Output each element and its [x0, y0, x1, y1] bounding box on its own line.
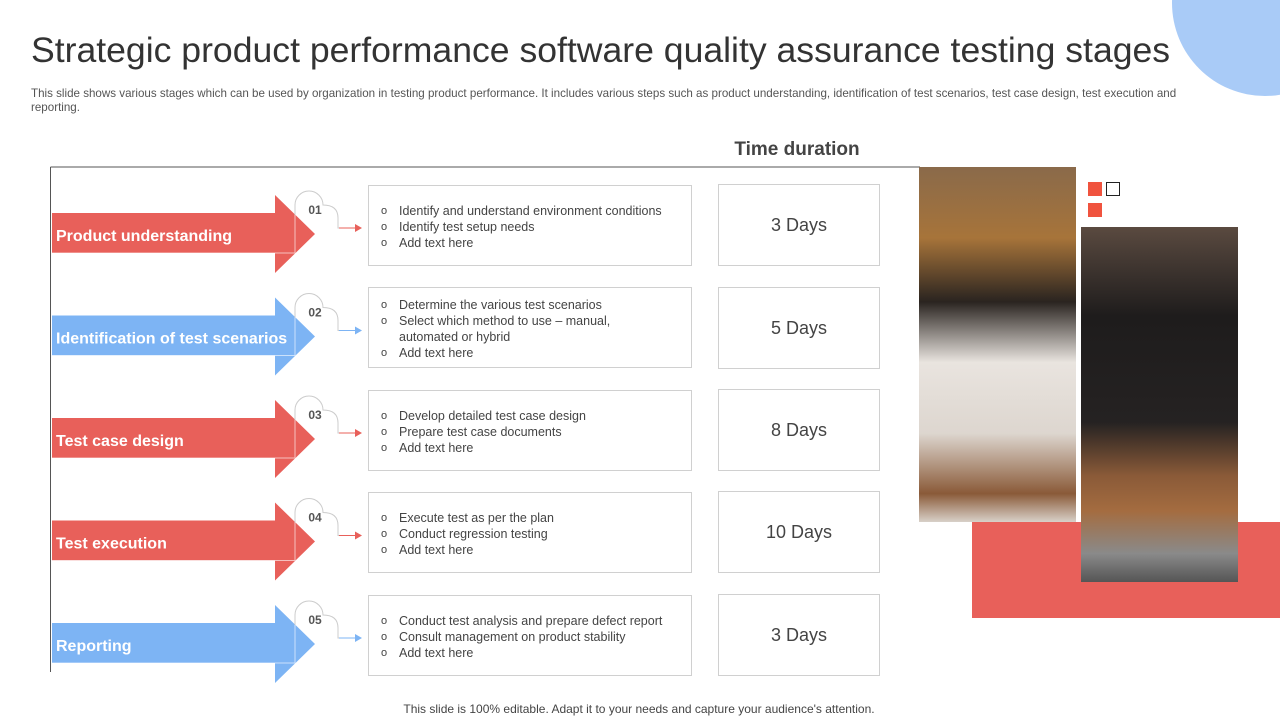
text box 4: Add text here — [399, 543, 473, 557]
duration 2 — [718, 287, 880, 369]
arrow 5: 05 — [308, 613, 322, 627]
arrow 1 — [52, 191, 362, 273]
text box 3 — [368, 390, 692, 471]
arrow 3: Test case design — [56, 433, 184, 450]
arrow 4: 04 — [308, 510, 322, 524]
arrow 5 — [52, 601, 362, 683]
arrow 1: Product understanding — [56, 228, 232, 245]
duration 3 — [718, 389, 880, 471]
duration 5 — [718, 594, 880, 676]
text box 2: Select which method to use – manual, automated or hybrid — [399, 314, 610, 344]
text box 4: Execute test as per the plan — [399, 511, 554, 525]
arrow 2: Identification of test scenarios — [56, 330, 287, 348]
subtitle: This slide shows various stages which can be used by organization in testing product performance. It includes various steps such as product understanding, identification of test scenarios, test case design, test execution and reporting. — [31, 87, 1176, 114]
red block — [972, 522, 1280, 618]
photo 1 — [919, 167, 1076, 522]
text box 4 — [368, 492, 692, 573]
decorative squares — [1088, 182, 1102, 196]
arrow 1: 01 — [308, 203, 322, 217]
arrow 3: 03 — [308, 408, 322, 422]
text box 4: Conduct regression testing — [399, 527, 548, 541]
text box 5: Consult management on product stability — [399, 630, 626, 644]
heading: time duration: Time duration — [734, 139, 860, 160]
text box 1 — [368, 185, 692, 266]
duration 3: 8 Days — [771, 420, 827, 440]
arrow 4 — [52, 498, 362, 580]
text box 2: Add text here — [399, 346, 473, 360]
photo 2 — [1081, 227, 1238, 582]
title: Strategic product performance software quality assurance testing stages — [31, 30, 1170, 70]
text box 5 — [368, 595, 692, 676]
arrow 3 — [52, 396, 362, 478]
duration 4 — [718, 491, 880, 573]
duration 1 — [718, 184, 880, 266]
text box 5: Conduct test analysis and prepare defect report — [399, 614, 662, 628]
text box 1: Add text here — [399, 236, 473, 250]
text box 3: Develop detailed test case design — [399, 409, 586, 423]
text box 1: Identify test setup needs — [399, 220, 535, 234]
decorative circle — [1172, 0, 1280, 96]
text box 5: Add text here — [399, 646, 473, 660]
text box 1: Identify and understand environment conditions — [399, 204, 662, 218]
text box 2 — [368, 287, 692, 368]
arrow 5: Reporting — [56, 638, 132, 655]
footer: This slide is 100% editable. Adapt it to your needs and capture your audience's attention. — [403, 702, 875, 716]
text box 3: Prepare test case documents — [399, 425, 562, 439]
duration 2: 5 Days — [771, 318, 827, 338]
stage arrows — [50, 166, 920, 683]
duration 5: 3 Days — [771, 624, 827, 644]
text box 3: Add text here — [399, 441, 473, 455]
arrow 4: Test execution — [56, 536, 167, 552]
duration 1: 3 Days — [771, 214, 827, 234]
arrow 2: 02 — [308, 306, 322, 320]
arrow 2 — [52, 294, 362, 376]
text box 2: Determine the various test scenarios — [399, 298, 602, 312]
duration 4: 10 Days — [766, 522, 832, 542]
